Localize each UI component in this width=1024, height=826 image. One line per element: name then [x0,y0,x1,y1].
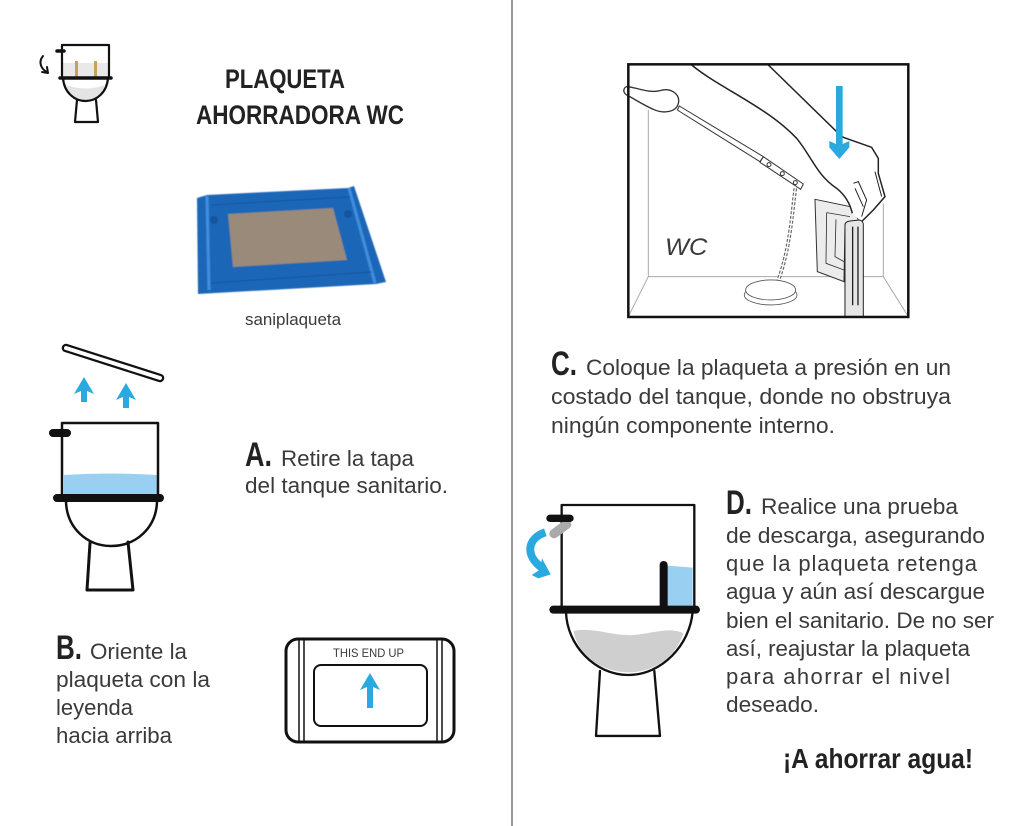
title: AHORRADORA WC [196,100,404,130]
step D text: así, reajustar la plaqueta [726,636,971,661]
step D text [726,484,994,717]
WC label: WC [665,234,708,261]
icon: small toilet [40,45,111,122]
step B text: B. [56,629,82,667]
illustration: step C tank interior [624,64,908,317]
frame [628,64,908,317]
icon: up arrows [74,377,136,408]
bowl water [573,630,683,672]
illustration: step A toilet with lid removed [53,348,160,590]
step D text: Realice una prueba [761,494,959,519]
plate front edge [845,220,863,317]
step C text: C. [551,345,577,383]
chain [777,188,795,285]
handle [554,524,567,534]
step B text: plaqueta con la [56,667,211,692]
step D text: agua y aún así descargue [726,579,985,604]
title: PLAQUETA [225,64,345,94]
step D text: que la plaqueta retenga [726,551,978,576]
step A text: Retire la tapa [281,446,415,471]
photo: saniplaqueta [197,186,386,294]
tank walls [628,110,908,317]
step B text: leyenda [56,695,134,720]
step A text: del tanque sanitario. [245,473,448,498]
step D text: deseado. [726,692,819,717]
caption: saniplaqueta: saniplaqueta [245,311,342,329]
step D text: bien el sanitario. De no ser [726,608,994,633]
step C text: ningún componente interno. [551,413,835,438]
plunger [744,280,797,305]
step D text: de descarga, asegurando [726,523,985,548]
illustration: plate with this end up label [286,639,454,742]
lid [66,348,160,378]
icon: curved blue arrow [530,532,551,578]
step C text [551,345,952,438]
step C text: costado del tanque, donde no obstruya [551,384,952,409]
step A text [245,436,448,498]
step C text: Coloque la plaqueta a presión en un [586,355,951,380]
title [196,64,404,130]
step A text: A. [245,436,272,474]
step D text: D. [726,484,752,522]
illustration: plate with this end up label: THIS END UP [333,646,404,660]
illustration: step D toilet flush test [530,505,696,736]
icon: blue down arrow [829,86,849,159]
step B text [56,629,211,748]
plate in tank [652,565,676,608]
step B text: Oriente la [90,639,188,664]
closing slogan: ¡A ahorrar agua! [783,743,973,774]
flush handle and rod [624,87,803,189]
icon: blue up arrow [360,673,380,708]
tank water [64,474,157,496]
arm and hand [692,65,885,222]
step B text: hacia arriba [56,723,173,748]
plate back [815,199,858,282]
tank water [667,566,693,606]
step D text: para ahorrar el nivel [726,664,950,689]
